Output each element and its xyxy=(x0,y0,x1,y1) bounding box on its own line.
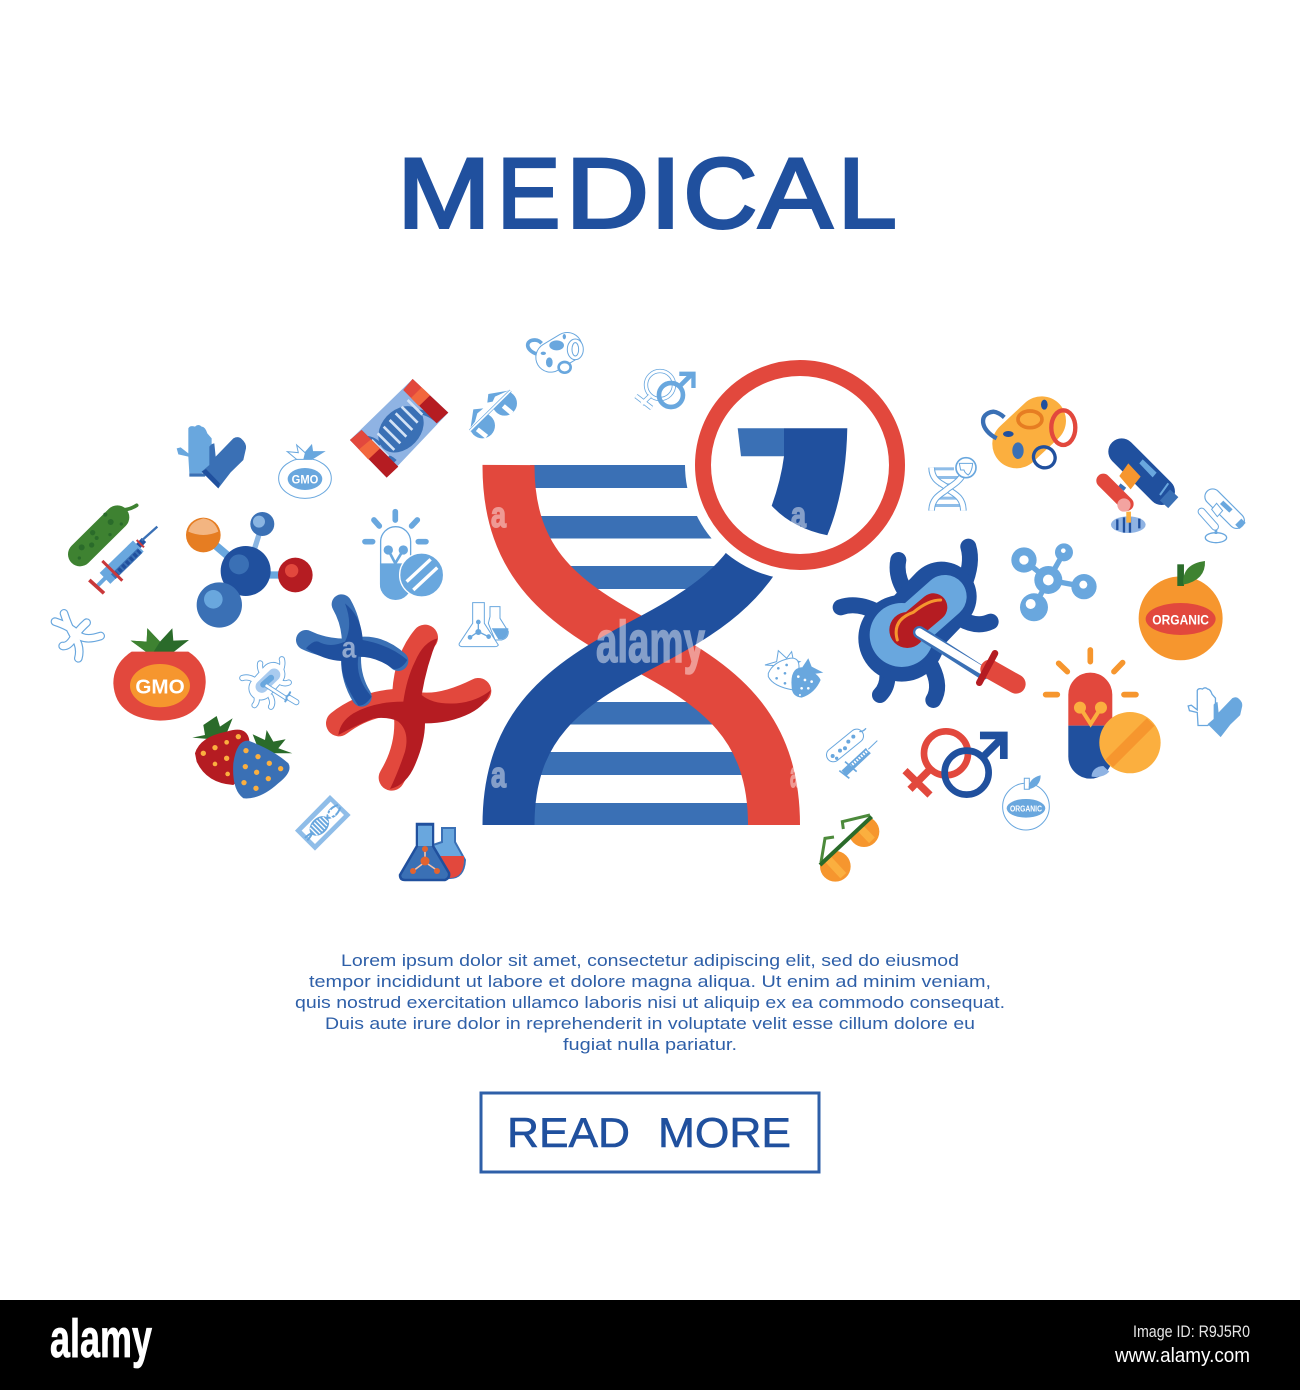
body text: quis nostrud exercitation ullamco laboris nisi ut aliquip ex ea commodo consequat. xyxy=(295,993,1005,1012)
icon: DNA outline with magnifier xyxy=(932,458,976,511)
watermark: a xyxy=(491,754,507,795)
icon: molecule light xyxy=(1011,543,1097,621)
icon: flask outline xyxy=(459,603,508,647)
icon: microbe with dropper xyxy=(841,547,1016,700)
icon: orange cell xyxy=(983,400,1075,472)
image id: Image ID: R9J5R0 xyxy=(1133,1322,1250,1341)
icon: strawberries outline xyxy=(765,651,823,698)
read more button: MORE xyxy=(658,1109,791,1156)
title: I xyxy=(650,138,682,248)
icon: cucumber xyxy=(78,505,137,560)
watermark: a xyxy=(791,494,807,535)
watermark xyxy=(491,494,807,795)
read more button xyxy=(481,1093,819,1172)
footer logo: alamy xyxy=(50,1309,152,1369)
icon: microscope xyxy=(1103,452,1173,533)
icon: tomato GMO: GMO xyxy=(135,675,185,698)
magnified strand dark part xyxy=(772,428,847,535)
watermark letter: a xyxy=(342,632,357,665)
icon: GMO tomato outline xyxy=(279,445,331,498)
icon: cucumber and syringe outline xyxy=(831,728,877,778)
icon: DNA packet xyxy=(350,379,448,478)
icon: tomato GMO xyxy=(113,628,206,721)
icon: gender symbols xyxy=(905,731,1008,795)
watermark: alamy xyxy=(596,610,705,675)
title: A xyxy=(759,138,832,248)
icon: chromosome outline xyxy=(55,613,101,658)
red strand xyxy=(508,465,774,825)
DNA rungs xyxy=(530,465,770,825)
title: L xyxy=(838,138,897,248)
icon: molecule coloured xyxy=(186,512,313,628)
icon: microscope outline xyxy=(1202,497,1243,543)
icon: organic outline: ORGANIC xyxy=(1010,804,1042,813)
icon: blue gloves xyxy=(177,425,246,488)
icon: DNA packet outline xyxy=(295,795,351,851)
icon: flasks coloured xyxy=(400,824,465,880)
blue strand xyxy=(508,540,765,825)
icon: GMO tomato outline: GMO xyxy=(292,472,318,486)
icon: pill with rays outline xyxy=(365,512,444,600)
body text: fugiat nulla pariatur. xyxy=(563,1035,737,1054)
icon: gloves outline xyxy=(1188,688,1242,737)
icon: organic orange: ORGANIC xyxy=(1152,611,1209,627)
footer bar xyxy=(0,1300,1300,1390)
watermark: a xyxy=(790,754,799,795)
icon: glasses orange xyxy=(810,802,879,882)
icon: organic orange xyxy=(1139,561,1223,660)
icon: capsule and pill with rays xyxy=(1046,650,1161,779)
watermark: a xyxy=(491,494,507,535)
icon: organic outline xyxy=(1003,775,1049,830)
title: E xyxy=(497,138,560,248)
title: C xyxy=(683,138,757,248)
icon: strawberries xyxy=(192,716,292,798)
icon: syringe xyxy=(89,527,157,593)
body text xyxy=(295,951,1005,1054)
icon: blue chromosome xyxy=(306,603,407,706)
title: D xyxy=(566,138,649,248)
central DNA helix with magnifier xyxy=(491,350,915,825)
icon: cell outline xyxy=(528,334,583,373)
body text: Duis aute irure dolor in reprehenderit in voluptate velit esse cillum dolore eu xyxy=(325,1014,975,1033)
icon: red chromosome xyxy=(338,638,491,789)
body text: tempor incididunt ut labore et dolore magna aliqua. Ut enim ad minim veniam, xyxy=(309,972,991,991)
icon: glasses outline xyxy=(463,383,517,438)
icon: gender symbols outline xyxy=(636,371,696,408)
magnifier ring xyxy=(703,368,897,562)
website: www.alamy.com xyxy=(1114,1345,1250,1367)
body text: Lorem ipsum dolor sit amet, consectetur adipiscing elit, sed do eiusmod xyxy=(341,951,959,970)
magnified strand light part xyxy=(738,428,784,456)
title: M xyxy=(397,138,491,248)
icon: microbe with dropper outline xyxy=(242,659,296,707)
read more button: READ xyxy=(507,1109,630,1156)
